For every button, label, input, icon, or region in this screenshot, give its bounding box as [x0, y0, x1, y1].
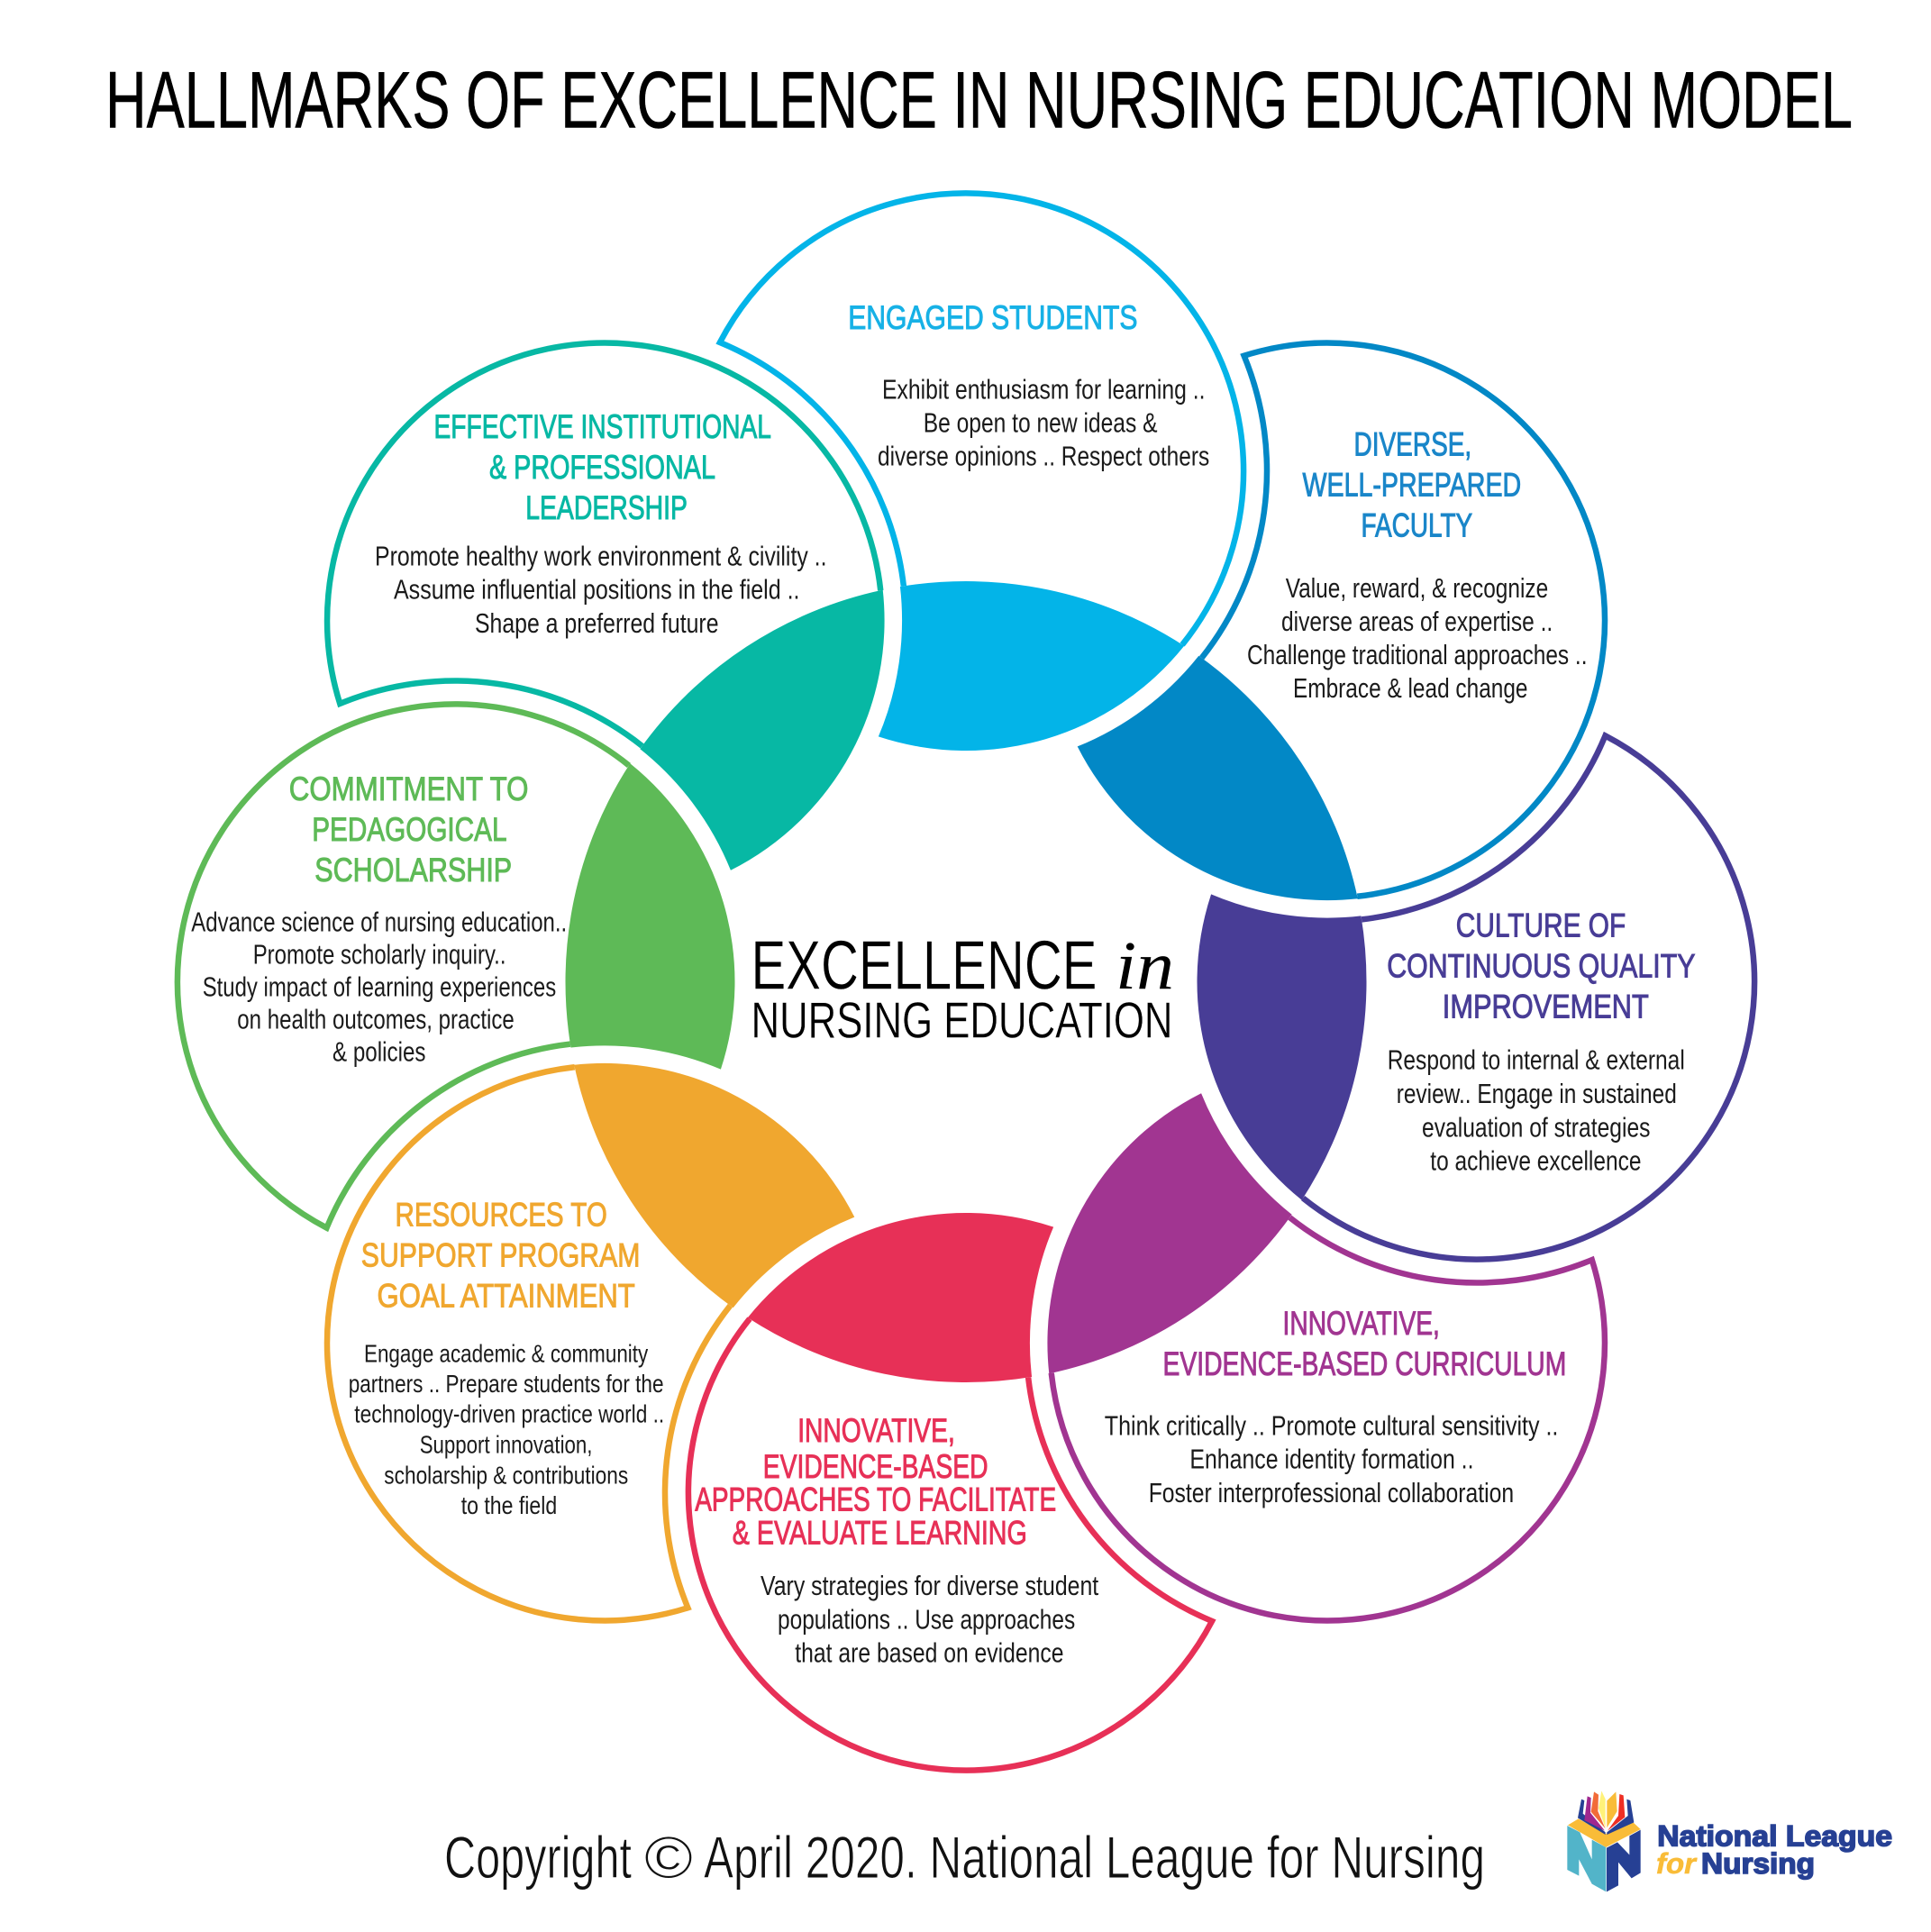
- text: effective leadership: Assume influential positions in the field ..: [394, 574, 800, 606]
- text: engaged students: diverse opinions .. Respect others: [878, 441, 1209, 472]
- heading: innovative approaches: & EVALUATE LEARNING: [733, 1514, 1027, 1552]
- text: innovative curriculum: Think critically .. Promote cultural sensitivity ..: [1105, 1409, 1558, 1441]
- heading: pedagogical scholarship: PEDAGOGICAL: [312, 810, 506, 848]
- heading: resources: GOAL ATTAINMENT: [377, 1276, 635, 1314]
- text: innovative curriculum: Enhance identity formation ..: [1189, 1443, 1474, 1474]
- text: innovative curriculum: [1105, 1409, 1558, 1508]
- heading: resources: [361, 1195, 640, 1314]
- text: resources: [349, 1339, 664, 1519]
- petal: effective leadership: [234, 228, 998, 992]
- text: diverse faculty: [1247, 572, 1588, 704]
- heading: diverse faculty: FACULTY: [1361, 506, 1472, 543]
- text: innovative approaches: Vary strategies for diverse student: [761, 1570, 1099, 1601]
- copyright footer: April 2020. National League for Nursing: [704, 1824, 1485, 1891]
- text: pedagogical scholarship: & policies: [332, 1035, 425, 1067]
- text: innovative curriculum: Foster interprofessional collaboration: [1149, 1477, 1514, 1508]
- text: diverse faculty: Value, reward, & recognize: [1286, 572, 1548, 604]
- heading: diverse faculty: WELL-PREPARED: [1303, 465, 1521, 503]
- text: effective leadership: Promote healthy work environment & civility ..: [375, 540, 827, 571]
- petal: engaged students: [720, 193, 1243, 751]
- text: culture of quality: review.. Engage in sustained: [1397, 1078, 1677, 1109]
- heading: culture of quality: CONTINUOUS QUALITY: [1387, 946, 1696, 984]
- panel: culture of continuous quality improvement: [1198, 735, 1754, 1260]
- petal: innovative curriculum: [934, 971, 1698, 1736]
- text: resources: partners .. Prepare students for the: [349, 1370, 663, 1398]
- heading: innovative approaches: INNOVATIVE,: [797, 1411, 955, 1449]
- text: engaged students: Exhibit enthusiasm for learning ..: [882, 374, 1206, 406]
- heading: pedagogical scholarship: SCHOLARSHIP: [314, 851, 512, 889]
- text: pedagogical scholarship: on health outcomes, practice: [237, 1004, 515, 1035]
- heading: effective leadership: LEADERSHIP: [525, 488, 688, 526]
- text: engaged students: [878, 374, 1209, 472]
- text: resources: scholarship & contributions: [384, 1461, 628, 1489]
- panel: engaged students: [720, 193, 1243, 751]
- heading: engaged students: ENGAGED STUDENTS: [848, 298, 1137, 336]
- heading: innovative curriculum: INNOVATIVE,: [1283, 1304, 1440, 1342]
- heading: diverse faculty: [1303, 424, 1521, 543]
- copyright footer: [444, 1824, 1485, 1891]
- text: effective leadership: Shape a preferred future: [475, 607, 719, 639]
- panel: innovative curriculum: [934, 971, 1698, 1736]
- heading: culture of quality: IMPROVEMENT: [1443, 988, 1649, 1025]
- text: engaged students: Be open to new ideas &: [924, 406, 1158, 438]
- panel: innovative approaches: [688, 1213, 1212, 1771]
- heading: culture of quality: [1387, 907, 1696, 1025]
- center label: in: [1116, 928, 1174, 1004]
- text: innovative approaches: [761, 1570, 1099, 1669]
- text: resources: Engage academic & community: [364, 1339, 648, 1367]
- petal: resources: [212, 949, 977, 1713]
- icon: book and NN cube: [1567, 1791, 1641, 1891]
- text: pedagogical scholarship: Study impact of learning experiences: [203, 971, 556, 1003]
- text: innovative approaches: populations .. Use approaches: [778, 1604, 1075, 1635]
- logo wordmark: [1656, 1819, 1892, 1880]
- text: culture of quality: [1388, 1044, 1685, 1176]
- text: pedagogical scholarship: Promote scholarly inquiry..: [253, 938, 506, 970]
- text: resources: to the field: [461, 1491, 557, 1519]
- text: culture of quality: Respond to internal & external: [1388, 1044, 1685, 1076]
- text: culture of quality: evaluation of strategies: [1422, 1111, 1651, 1143]
- petal: pedagogical scholarship: [178, 704, 734, 1228]
- heading: pedagogical scholarship: COMMITMENT TO: [289, 770, 528, 807]
- heading: resources: RESOURCES TO: [395, 1195, 607, 1233]
- heading: effective leadership: & PROFESSIONAL: [489, 448, 715, 486]
- text: innovative approaches: that are based on evidence: [795, 1636, 1063, 1669]
- petal: diverse faculty: [955, 251, 1720, 1015]
- heading: innovative curriculum: [1162, 1304, 1566, 1382]
- heading: innovative curriculum: EVIDENCE-BASED CURRICULUM: [1162, 1344, 1566, 1382]
- heading: effective leadership: EFFECTIVE INSTITUTIONAL: [434, 407, 771, 445]
- heading: pedagogical scholarship: [289, 770, 528, 889]
- logo: National League for Nursing: [1567, 1791, 1892, 1891]
- text: effective leadership: [375, 540, 827, 639]
- logo wordmark: for: [1656, 1847, 1698, 1880]
- heading: innovative approaches: APPROACHES TO FACILITATE: [695, 1481, 1056, 1518]
- petal: culture of quality: [1198, 735, 1754, 1260]
- heading: resources: SUPPORT PROGRAM: [361, 1236, 640, 1274]
- text: resources: Support innovation,: [420, 1431, 593, 1459]
- logo wordmark: Nursing: [1701, 1847, 1815, 1880]
- center label: EXCELLENCE: [751, 926, 1098, 1004]
- center label: [751, 926, 1174, 1050]
- heading: innovative approaches: [695, 1411, 1056, 1552]
- text: diverse faculty: Challenge traditional approaches ..: [1247, 639, 1588, 670]
- panel: diverse faculty: [955, 251, 1720, 1015]
- heading: effective leadership: [434, 407, 771, 526]
- text: pedagogical scholarship: [191, 906, 567, 1067]
- panel: resources: [212, 949, 977, 1713]
- text: pedagogical scholarship: Advance science of nursing education..: [191, 906, 567, 937]
- logo wordmark: National League: [1657, 1819, 1892, 1852]
- center label: NURSING EDUCATION: [751, 992, 1173, 1050]
- copyright footer: ©: [644, 1824, 693, 1891]
- text: resources: technology-driven practice world ..: [354, 1400, 664, 1428]
- panel: pedagogical scholarship: [178, 704, 734, 1228]
- text: diverse faculty: Embrace & lead change: [1293, 672, 1528, 704]
- heading: diverse faculty: DIVERSE,: [1353, 424, 1471, 462]
- text: culture of quality: to achieve excellence: [1430, 1144, 1642, 1176]
- petal: innovative approaches: [688, 1213, 1212, 1771]
- copyright footer: Copyright: [444, 1824, 632, 1891]
- heading: innovative approaches: EVIDENCE-BASED: [763, 1447, 988, 1485]
- text: diverse faculty: diverse areas of expertise ..: [1281, 606, 1553, 637]
- panel: effective leadership: [234, 228, 998, 992]
- heading: culture of quality: CULTURE OF: [1456, 907, 1626, 944]
